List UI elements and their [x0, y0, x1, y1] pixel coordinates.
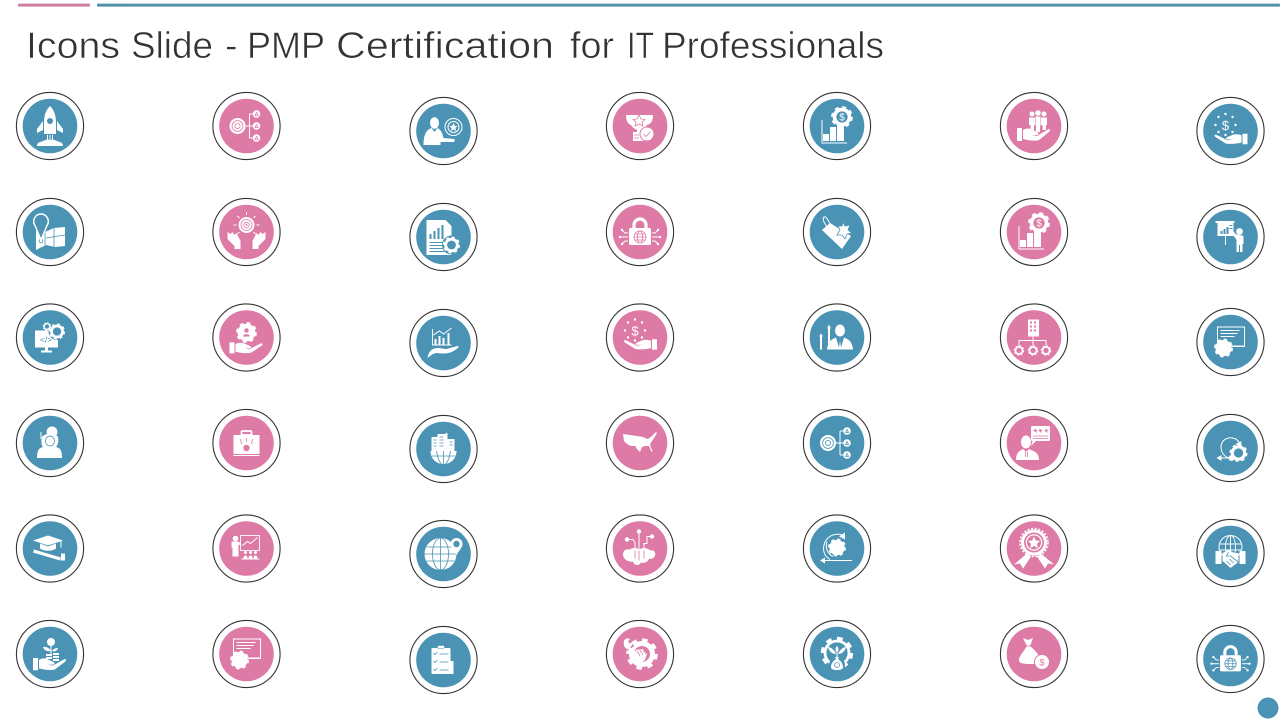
icon badge: growth chart with gear pink	[1000, 198, 1068, 266]
icon badge: plant with coins in hand	[16, 620, 84, 688]
icon badge: trophy with check	[606, 92, 674, 160]
icon badge: globe handshake	[1197, 519, 1264, 587]
icon badge: award ribbon	[1000, 515, 1068, 582]
icon badge: briefcase	[213, 409, 280, 477]
title: -	[225, 24, 238, 66]
title: PMP	[247, 24, 325, 66]
icon badge: money in hand pink	[606, 304, 674, 371]
title: Certification	[336, 24, 554, 66]
icon badge: map with pin	[16, 198, 84, 266]
icon badge: lock with globe blue	[1197, 625, 1264, 693]
icon badge: USA map	[606, 409, 674, 477]
icon badge: target and hands	[213, 198, 280, 266]
icon badge: globe with buildings	[410, 415, 477, 483]
icon badge: support person	[16, 409, 84, 477]
page marker circle	[1258, 698, 1278, 718]
icon badge: money in hand	[1197, 97, 1264, 165]
title: Professionals	[662, 24, 884, 66]
icon badge: target tree pink	[213, 92, 280, 160]
icon badge: growth chart with gear	[803, 92, 871, 160]
icon badge: document with chart and gear	[410, 203, 477, 271]
icon badge: money bag with coin: $	[1039, 658, 1045, 668]
title: IT	[627, 24, 654, 66]
title	[26, 24, 884, 66]
icon badge: monitor code with gears	[16, 304, 84, 371]
icon badge: cycle with gear	[1197, 414, 1264, 482]
icon badge: gear person in hand	[213, 304, 280, 371]
icon badge: screen with gear	[1197, 308, 1264, 376]
icon badge: agile gear cycle	[803, 515, 871, 582]
icon badge: screen with gear pink	[213, 620, 280, 688]
title: Slide	[131, 24, 213, 66]
title: for	[570, 24, 614, 66]
icon badge: people in hand	[1000, 92, 1068, 160]
icon badge: gear with wrench and fist	[606, 620, 674, 688]
icon badge: person with review bubble	[1000, 409, 1068, 477]
icon badge: graduation cap	[16, 515, 84, 582]
icon badge: price tags	[803, 198, 871, 266]
title: Icons	[26, 24, 120, 66]
icon badge: rocket	[16, 92, 84, 160]
icon badge: businessman with arrows	[803, 304, 871, 371]
icon badge: target tree blue	[803, 409, 871, 477]
icon badge: lock with globe pink	[606, 198, 674, 266]
icon badge: building hierarchy	[1000, 304, 1068, 371]
top accent bars	[18, 4, 1280, 7]
icon badge: money bag with coin	[1000, 620, 1068, 688]
icon badge: chart over hand	[410, 309, 477, 377]
icon badge: presenter with board	[1197, 203, 1264, 271]
icon badge: businessman with star target	[410, 97, 477, 165]
icon badge: globe with pin	[410, 520, 477, 588]
icon badge: cloud brain circuit	[606, 515, 674, 582]
icon badge: teacher with audience	[213, 515, 280, 582]
icon badge: monitor code with gears: </>	[40, 334, 52, 344]
icon badge: gear with plant and bag	[803, 620, 871, 688]
icon badge: clipboard checklist	[410, 626, 477, 694]
